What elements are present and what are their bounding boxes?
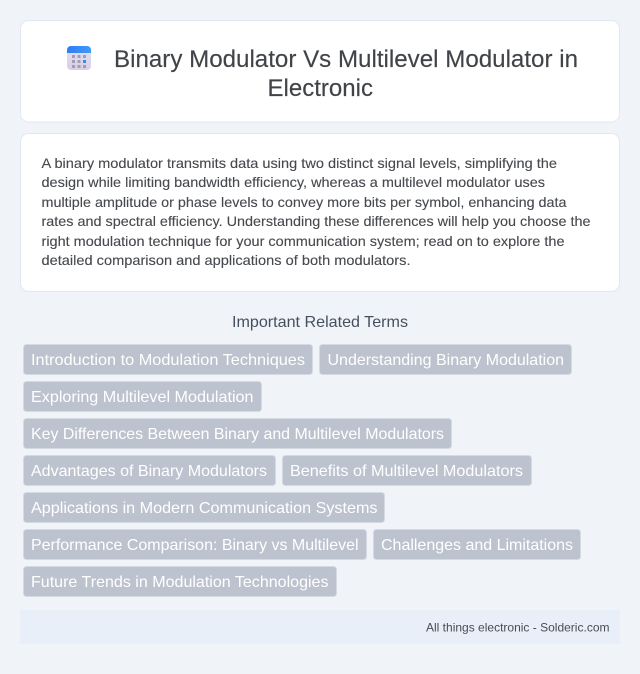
text block: introduction paragraph: design while limiting bandwidth efficiency, whereas a multilevel modulator uses	[42, 174, 545, 190]
tag: key differences: Key Differences Between Binary and Multilevel Modulators	[31, 426, 444, 443]
footer: All things electronic - Solderic.com	[426, 620, 610, 634]
tag: challenges	[374, 530, 580, 560]
tag: future trends	[24, 566, 336, 596]
title	[114, 46, 578, 102]
panel: introduction	[20, 134, 620, 292]
tag: challenges: Challenges and Limitations	[381, 537, 573, 554]
tag: binary modulation	[320, 344, 572, 374]
tag: advantages	[24, 456, 276, 486]
tag: binary modulation: Understanding Binary Modulation	[328, 352, 564, 369]
tag: future trends: Future Trends in Modulation Technologies	[31, 574, 328, 591]
tag: benefits	[282, 456, 532, 486]
tag: advantages: Advantages of Binary Modulators	[31, 463, 267, 480]
text block: introduction paragraph: detailed comparison and applications of both modulators.	[42, 252, 410, 268]
text block: introduction paragraph: right modulation technique for your communication system; read on to explore the	[42, 233, 565, 249]
tag: key differences	[24, 418, 452, 448]
heading: related terms: Important Related Terms	[232, 314, 408, 331]
tag: introduction: Introduction to Modulation Techniques	[31, 352, 305, 369]
text block: introduction paragraph: multiple amplitude or phase levels to convey more bits per symbol, enhancing data	[42, 194, 567, 210]
footer	[20, 610, 620, 644]
tag: multilevel modulation: Exploring Multilevel Modulation	[31, 389, 254, 406]
text block: introduction paragraph: A binary modulator transmits data using two distinct signal levels, simplifying the	[42, 155, 557, 171]
tag: introduction	[24, 344, 312, 374]
tag: performance: Performance Comparison: Binary vs Multilevel	[31, 537, 358, 554]
tag: multilevel modulation	[24, 382, 262, 412]
tag: benefits: Benefits of Multilevel Modulators	[290, 463, 523, 480]
icon: calendar	[67, 46, 91, 70]
text block: introduction paragraph	[42, 155, 591, 268]
tag: applications	[24, 492, 384, 522]
tag: performance	[24, 530, 366, 560]
tag: applications: Applications in Modern Communication Systems	[31, 500, 378, 517]
tag list: related terms	[24, 344, 580, 596]
title: Electronic	[268, 75, 373, 102]
text block: introduction paragraph: rates and spectral efficiency. Understanding these differences will help you choose the	[42, 213, 591, 229]
title: Binary Modulator Vs Multilevel Modulator in	[114, 46, 578, 73]
panel: title card	[20, 20, 620, 122]
